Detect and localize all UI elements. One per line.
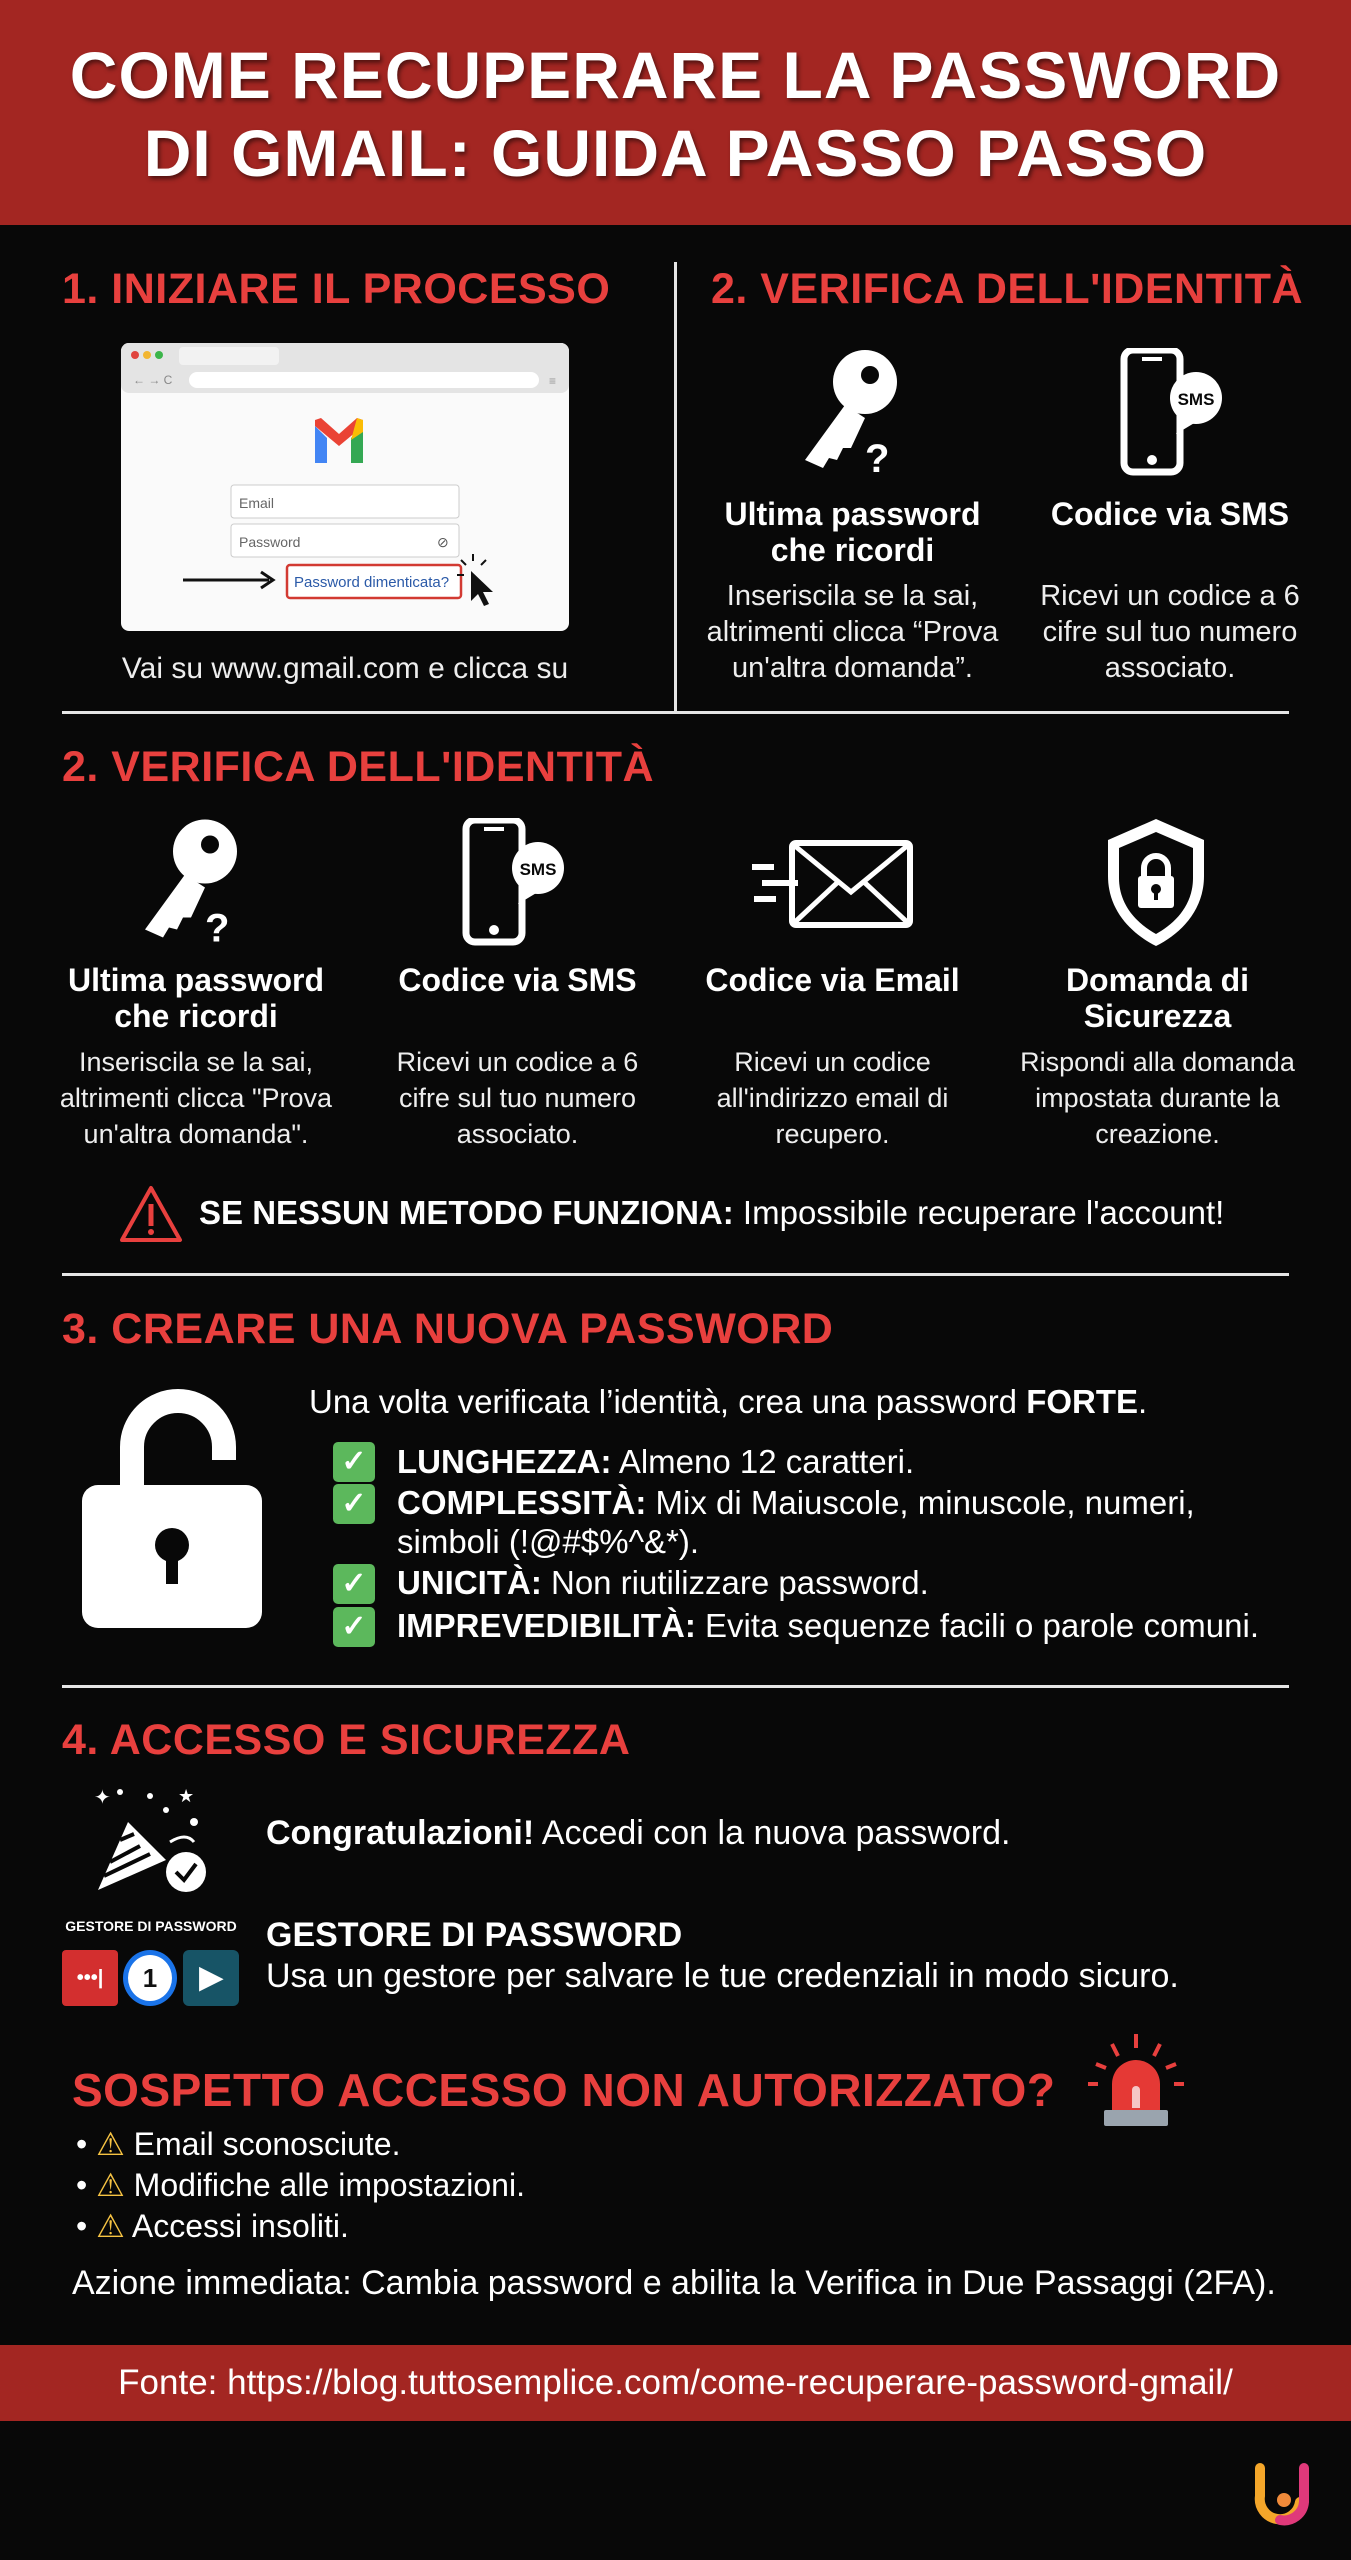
text: codice sms top: Codice via SMS (1051, 496, 1289, 532)
checklist (333, 1442, 1259, 1647)
text: ultima password top: un'altra domanda”. (732, 652, 973, 684)
password manager icons: GESTORE DI PASSWORD (65, 1918, 237, 1934)
icon: open padlock (82, 1389, 262, 1628)
title (70, 38, 1282, 190)
title: DI GMAIL: GUIDA PASSO PASSO (144, 116, 1207, 190)
column: codice email (705, 962, 960, 1149)
browser mockup: Password dimenticata? (294, 574, 449, 591)
section 3 heading: 3. CREARE UNA NUOVA PASSWORD (62, 1305, 833, 1353)
immediate action text: Azione immediata: Cambia password e abilita la Verifica in Due Passaggi (2FA). (72, 2264, 1276, 2302)
text: codice sms top: cifre sul tuo numero (1043, 616, 1297, 648)
warning bullets: • ⚠ Modifiche alle impostazioni. (76, 2167, 525, 2203)
column: ultima password: altrimenti clicca "Prova (60, 1083, 332, 1113)
icon: key (145, 820, 237, 946)
suspicious access heading: SOSPETTO ACCESSO NON AUTORIZZATO? (72, 2064, 1055, 2116)
section 1 heading: 1. INIZIARE IL PROCESSO (62, 265, 610, 313)
icon: phone sms: SMS (520, 860, 556, 879)
text: codice sms top (1040, 496, 1300, 684)
column: domanda di sicurezza: impostata durante la (1035, 1083, 1280, 1113)
checklist: IMPREVEDIBILITÀ: Evita sequenze facili o parole comuni. (397, 1607, 1259, 1644)
column: codice email: Codice via Email (705, 962, 960, 998)
column: domanda di sicurezza: Rispondi alla domanda (1020, 1047, 1295, 1077)
column: codice email: all'indirizzo email di (717, 1083, 948, 1113)
icon: phone sms top: SMS (1178, 390, 1214, 409)
text: ultima password top (707, 496, 998, 684)
icon: key top (805, 350, 897, 475)
warning bullets (76, 2126, 525, 2244)
icon: party popper: ✦ (94, 1787, 111, 1809)
browser mockup: ← → C (133, 373, 173, 387)
column: codice sms: Codice via SMS (398, 962, 637, 998)
icon: party popper (94, 1786, 206, 1892)
column: codice sms: associato. (457, 1119, 578, 1149)
checklist: LUNGHEZZA: Almeno 12 caratteri. (397, 1443, 914, 1480)
password manager icons: ▶ (199, 1961, 223, 1994)
logo (1254, 2463, 1309, 2526)
text: codice sms top: associato. (1105, 652, 1235, 684)
section 2 heading: 2. VERIFICA DELL'IDENTITÀ (62, 743, 654, 791)
icon: phone sms (462, 818, 564, 946)
text: ultima password top: Inseriscila se la sai, (727, 580, 978, 612)
icon: shield lock (1108, 819, 1204, 946)
browser mockup: ≡ (549, 374, 556, 388)
column: codice sms (397, 962, 638, 1149)
checklist: ✓ (341, 1610, 367, 1643)
text: ultima password top: altrimenti clicca “Prova (707, 616, 998, 648)
checklist: ✓ (341, 1487, 367, 1520)
browser mockup: Password (239, 534, 300, 550)
icon: phone sms top (1120, 348, 1222, 476)
icon: siren (1088, 2034, 1184, 2126)
text: ultima password top: che ricordi (771, 532, 934, 568)
section 2 top heading: 2. VERIFICA DELL'IDENTITÀ (711, 265, 1303, 313)
warning bullets: • ⚠ Email sconosciute. (76, 2126, 400, 2162)
column: ultima password: Inseriscila se la sai, (79, 1047, 313, 1077)
password manager text: Usa un gestore per salvare le tue credenziali in modo sicuro. (266, 1957, 1179, 1995)
password manager text: GESTORE DI PASSWORD (266, 1916, 682, 1954)
warning line (120, 1186, 1224, 1242)
section 4 heading: 4. ACCESSO E SICUREZZA (62, 1716, 630, 1764)
column: domanda di sicurezza: Domanda di (1066, 962, 1249, 998)
password manager text (266, 1916, 1179, 1995)
congratulations text: Congratulazioni! Accedi con la nuova password. (266, 1814, 1010, 1852)
section 3 intro: Una volta verificata l’identità, crea una password FORTE. (309, 1383, 1147, 1420)
footer source band: Fonte: https://blog.tuttosemplice.com/come-recuperare-password-gmail/ (118, 2363, 1233, 2402)
checklist: COMPLESSITÀ: Mix di Maiuscole, minuscole, numeri, (397, 1484, 1195, 1521)
column: codice email: recupero. (775, 1119, 890, 1149)
column: ultima password: che ricordi (114, 998, 278, 1034)
header banner (0, 0, 1351, 225)
column: ultima password (60, 962, 332, 1149)
icon: party popper: ★ (178, 1786, 194, 1806)
text: ultima password top: Ultima password (724, 496, 981, 532)
footer source band (0, 2345, 1351, 2421)
checklist: ✓ (341, 1567, 367, 1600)
column: domanda di sicurezza: Sicurezza (1084, 998, 1231, 1034)
column: ultima password: Ultima password (68, 962, 324, 998)
title: COME RECUPERARE LA PASSWORD (70, 38, 1281, 112)
section 1 caption: Vai su www.gmail.com e clicca su (122, 652, 568, 685)
password manager icons (62, 1918, 239, 2006)
column: ultima password: un'altra domanda". (84, 1119, 308, 1149)
icon: email (752, 840, 913, 928)
password manager icons: 1 (143, 1963, 157, 1993)
checklist: simboli (!@#$%^&*). (397, 1523, 699, 1560)
column: codice sms: cifre sul tuo numero (399, 1083, 636, 1113)
warning bullets: • ⚠ Accessi insoliti. (76, 2208, 349, 2244)
column: domanda di sicurezza (1020, 962, 1295, 1149)
browser mockup: Email (239, 495, 274, 511)
browser mockup (121, 343, 569, 631)
text: codice sms top: Ricevi un codice a 6 (1040, 580, 1300, 612)
checklist: ✓ (341, 1445, 367, 1478)
browser mockup: ⊘ (437, 534, 449, 550)
gmail M (315, 418, 363, 463)
password manager icons: •••| (77, 1967, 103, 1989)
vertical divider (674, 262, 677, 712)
warning line: SE NESSUN METODO FUNZIONA: Impossibile recuperare l'account! (199, 1194, 1224, 1231)
column: codice sms: Ricevi un codice a 6 (397, 1047, 638, 1077)
column: domanda di sicurezza: creazione. (1095, 1119, 1220, 1149)
column: codice email: Ricevi un codice (734, 1047, 931, 1077)
checklist: UNICITÀ: Non riutilizzare password. (397, 1564, 929, 1601)
